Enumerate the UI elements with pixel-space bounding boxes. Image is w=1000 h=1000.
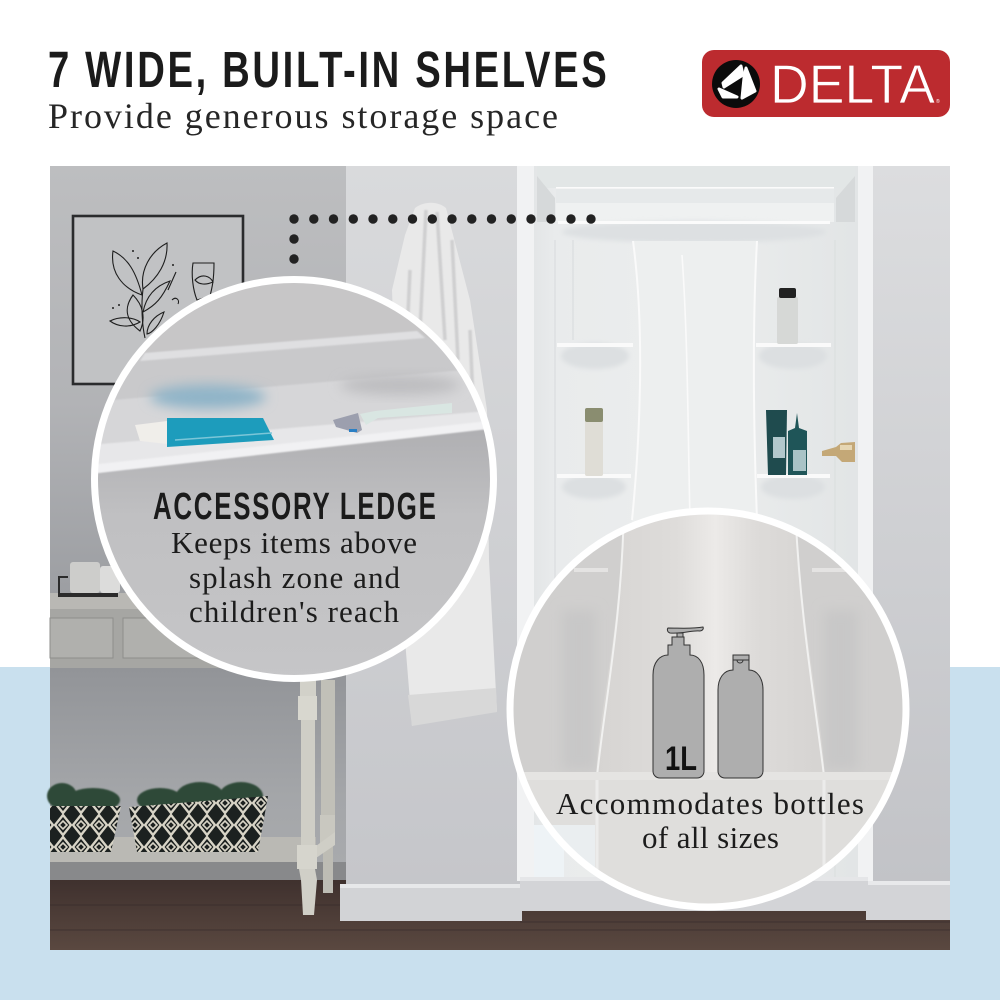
callout circle: bottle sizes — [505, 505, 915, 915]
title: 7 WIDE, BUILT-IN SHELVES — [48, 41, 607, 98]
items on table — [58, 562, 120, 597]
ledge close-up photo — [90, 275, 500, 690]
framed art — [73, 216, 243, 384]
top ceiling band — [537, 166, 855, 222]
towels in baskets — [47, 782, 263, 812]
table legs — [297, 680, 335, 915]
door knob — [822, 442, 855, 462]
right wall — [868, 166, 950, 882]
Delta logo: ® — [936, 98, 940, 105]
Delta logo — [702, 50, 950, 117]
outer jamb strips — [517, 166, 873, 881]
white ring — [94, 280, 494, 678]
icon: flip-cap bottle — [718, 655, 763, 778]
icon: pump bottle 1L — [653, 627, 704, 778]
centre column — [625, 241, 805, 881]
white ring — [510, 511, 906, 907]
description text: splash zone and — [189, 560, 400, 595]
Delta logo: DELTA — [770, 53, 935, 115]
razor — [333, 403, 452, 433]
description text: of all sizes — [642, 820, 779, 855]
lower wall — [50, 668, 347, 883]
subtitle: Provide generous storage space — [48, 96, 558, 136]
beige bottle — [585, 408, 603, 476]
room photo — [47, 166, 950, 950]
built-in shelves — [555, 240, 835, 880]
lower shelf and floor — [50, 837, 950, 950]
description text — [556, 786, 864, 855]
description text: children's reach — [189, 594, 400, 629]
clear bottle — [777, 288, 798, 344]
towel on hook — [392, 203, 497, 726]
patterned baskets — [50, 796, 268, 852]
green tube and bottle — [766, 410, 807, 475]
shower panel base — [520, 166, 870, 881]
description text: Keeps items above — [171, 525, 417, 560]
callout circle: accessory ledge — [90, 275, 500, 690]
left wall — [50, 166, 347, 596]
toothpaste tube — [135, 418, 274, 447]
accessory ledge — [558, 221, 830, 243]
wall pillar — [346, 166, 520, 886]
description text — [171, 525, 417, 629]
heading: accessory ledge: ACCESSORY LEDGE — [153, 485, 436, 527]
description text: Accommodates bottles — [556, 786, 864, 821]
icon: pump bottle 1L: 1L — [665, 740, 697, 778]
console table apron — [50, 593, 310, 668]
shower base — [520, 825, 868, 911]
shelf close-up photo — [517, 514, 902, 904]
dotted connector line — [289, 214, 596, 264]
right baseboard — [866, 881, 950, 920]
shower surround — [517, 166, 873, 911]
pillar baseboard — [340, 884, 522, 921]
